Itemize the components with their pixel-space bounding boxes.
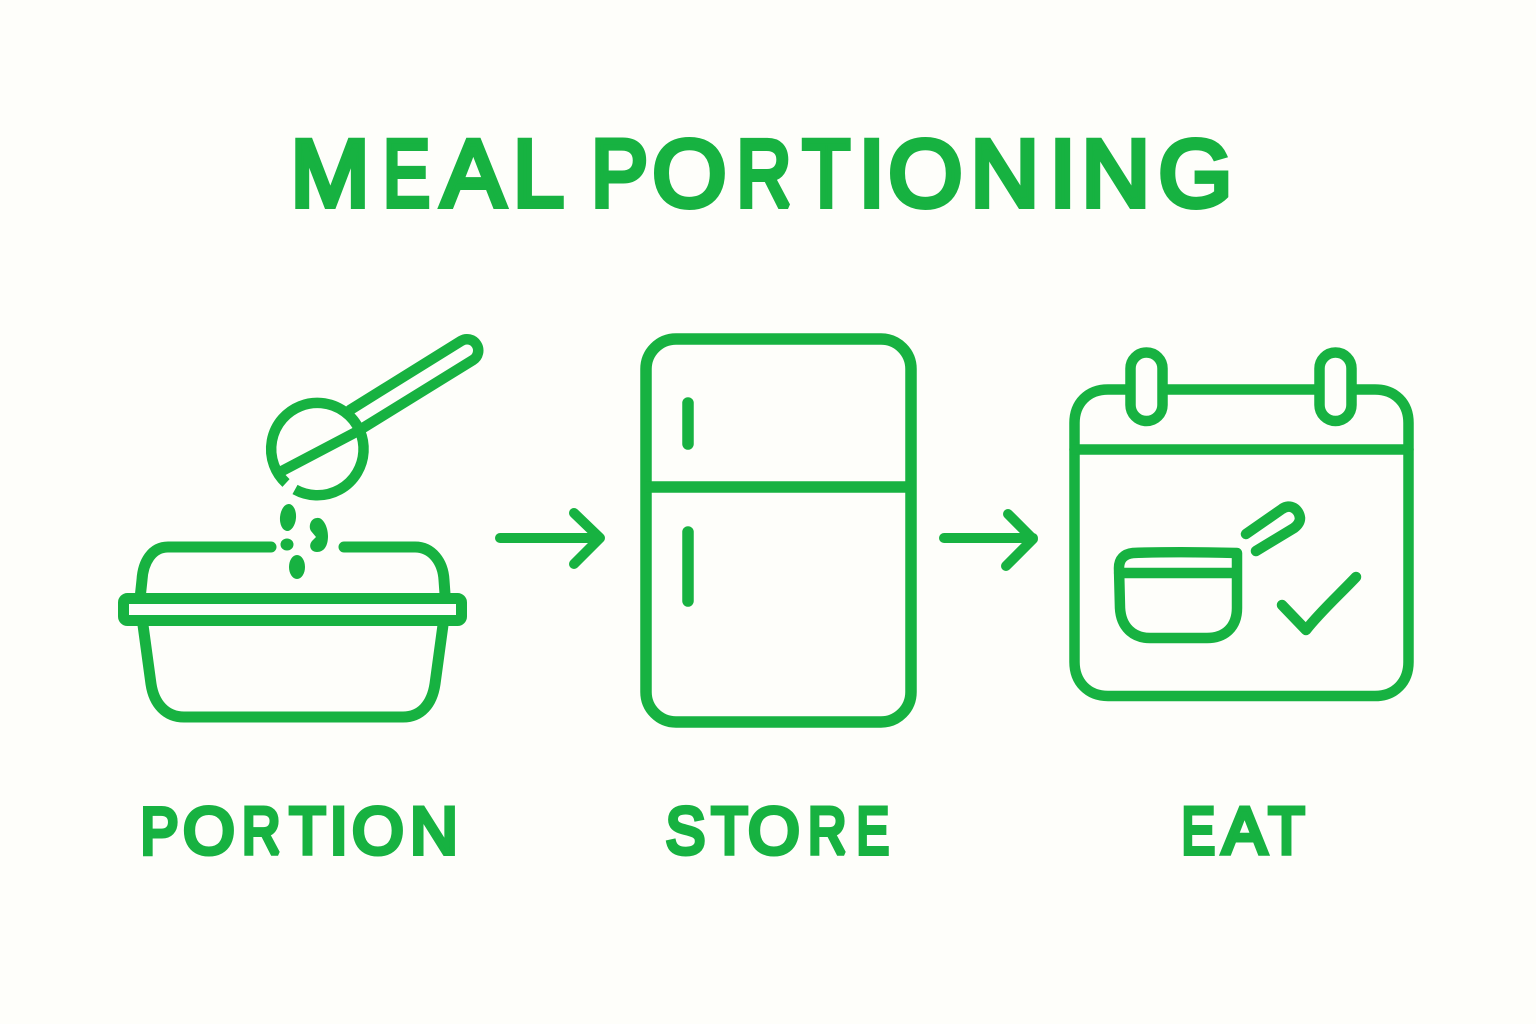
label: portion: I: [330, 794, 348, 868]
icon: refrigerator: [646, 339, 911, 722]
label: portion: P: [140, 794, 178, 868]
title: O: [652, 121, 726, 227]
title: E: [383, 121, 430, 227]
icon: meal container: [1119, 552, 1237, 638]
icon: spoon handle: [1246, 507, 1300, 551]
label: portion: O: [352, 794, 404, 868]
label: portion: T: [290, 794, 326, 868]
title: I: [1050, 121, 1076, 227]
label: portion: O: [183, 794, 235, 868]
label: eat: A: [1222, 794, 1267, 868]
label: store: R: [808, 794, 846, 868]
icon: scoop pouring beans into container: [124, 339, 478, 717]
icon: falling beans: [279, 503, 328, 579]
label: eat: E: [1182, 794, 1215, 868]
title: T: [802, 121, 850, 227]
label: eat: T: [1268, 794, 1304, 868]
label: store: O: [748, 794, 800, 868]
label: portion: R: [242, 794, 280, 868]
icon: calendar frame: [1074, 390, 1408, 696]
title: P: [591, 121, 648, 227]
arrow: store to eat: [944, 514, 1033, 566]
label: store: E: [856, 794, 889, 868]
label: store: T: [712, 794, 748, 868]
icon: check mark: [1282, 577, 1356, 630]
title: I: [858, 121, 885, 227]
icon: container rim: [124, 598, 462, 620]
title: O: [888, 121, 962, 227]
title: M: [290, 121, 370, 227]
icon: calendar rings: [1130, 352, 1352, 421]
title: N: [1082, 121, 1150, 227]
title: R: [736, 121, 792, 227]
icon: calendar with meal: [1074, 352, 1408, 696]
title: A: [442, 121, 506, 227]
label: portion: N: [410, 794, 458, 868]
label: store: S: [666, 794, 705, 868]
arrow: portion to store: [500, 513, 600, 564]
icon: scoop: [271, 339, 478, 495]
icon: container lid: [140, 547, 445, 594]
icon: container base: [143, 625, 443, 717]
title: N: [970, 121, 1039, 227]
title: G: [1158, 121, 1232, 227]
title: L: [513, 121, 561, 227]
